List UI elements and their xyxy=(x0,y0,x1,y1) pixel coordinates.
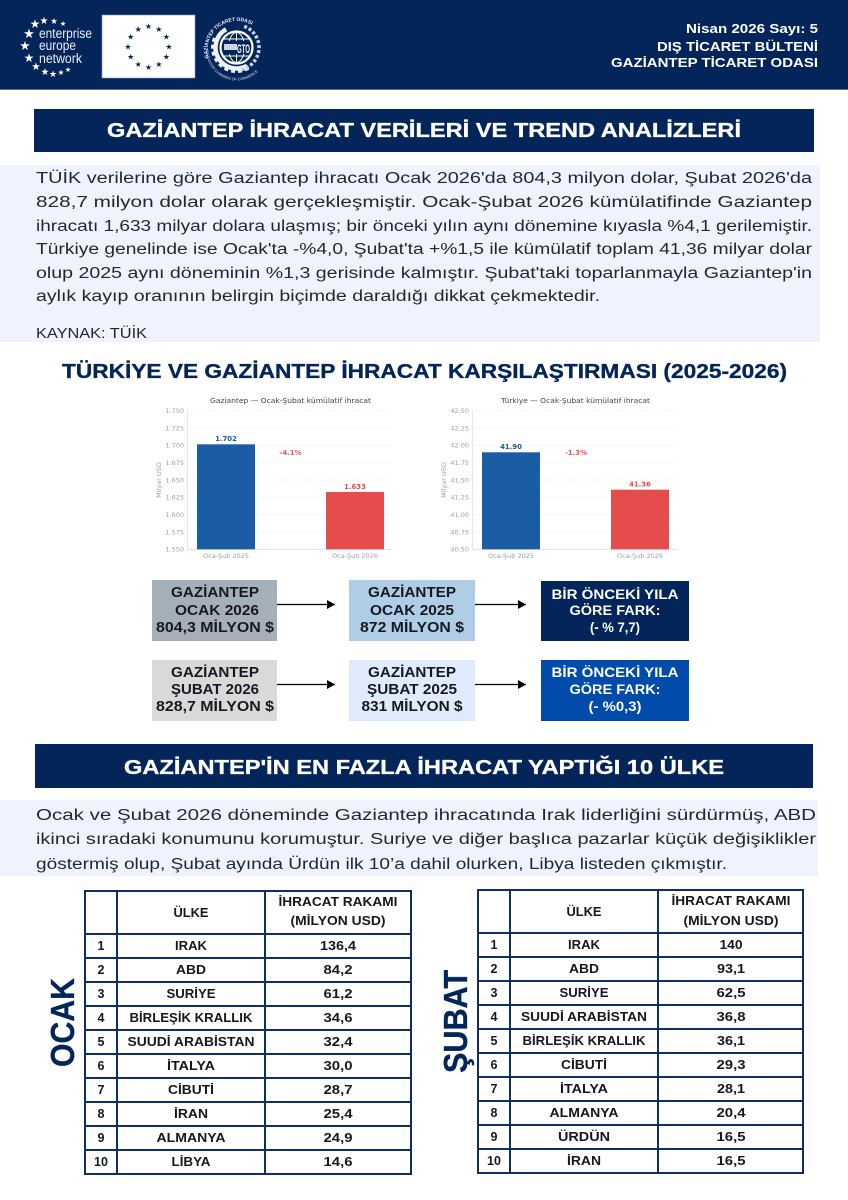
chart: Türkiye bar chart: 40.75 xyxy=(450,528,469,536)
row 5 xyxy=(491,1033,745,1048)
box: Gaziantep Şubat 2026: 828,7 MİLYON $ xyxy=(156,698,274,715)
row 9: 9 xyxy=(491,1130,498,1144)
row 1: IRAK xyxy=(568,938,600,952)
row 10: 10 xyxy=(487,1154,501,1168)
row 8: 8 xyxy=(98,1107,105,1121)
row 1: 1 xyxy=(98,939,105,953)
row 7: CİBUTİ xyxy=(168,1082,214,1097)
row 2: ABD xyxy=(176,963,206,977)
box: Gaziantep Ocak 2026: 804,3 MİLYON $ xyxy=(156,619,274,636)
box: Gaziantep Şubat 2025: GAZİANTEP xyxy=(368,664,456,681)
chart: Gaziantep bar chart: 1.750 xyxy=(165,407,184,415)
box: Şubat difference: (- %0,3) xyxy=(588,699,642,714)
icon: enterprise europe network logo: ★ xyxy=(23,26,35,41)
icon: enterprise europe network logo: ★ xyxy=(31,61,41,73)
bar: Türkiye 2026 xyxy=(611,480,669,560)
row 8: 8 xyxy=(491,1106,498,1120)
row 10 xyxy=(94,1154,353,1169)
bulletin info: GAZİANTEP TİCARET ODASI xyxy=(611,55,818,70)
row 8: ALMANYA xyxy=(550,1106,618,1120)
table header xyxy=(566,893,790,928)
row 8: İRAN xyxy=(174,1106,208,1121)
row 8 xyxy=(98,1106,353,1121)
chart: Türkiye bar chart: 42.00 xyxy=(450,442,469,450)
row 3: 62,5 xyxy=(716,986,746,1000)
row 6: 30,0 xyxy=(324,1059,353,1073)
box: Gaziantep Ocak 2026: GAZİANTEP xyxy=(171,584,259,601)
row 3: SURİYE xyxy=(560,985,608,1000)
row 10: İRAN xyxy=(567,1153,601,1168)
row 1 xyxy=(491,938,743,952)
panel: intro text: TÜİK verilerine göre Gaziantep ihracatı Ocak 2026'da 804,3 milyon dolar, Şubat 2026'da xyxy=(36,169,812,187)
row 5 xyxy=(98,1034,353,1049)
label: Ocak: OCAK xyxy=(44,978,81,1067)
row 2: 2 xyxy=(98,963,105,977)
chart: Gaziantep bar chart: 1.700 xyxy=(165,442,184,450)
chart: Gaziantep bar chart: 1.625 xyxy=(165,494,184,502)
row 1: IRAK xyxy=(175,939,207,953)
icon: EU flag: ★ xyxy=(163,32,170,42)
box: Şubat difference: GÖRE FARK: xyxy=(570,682,660,697)
box: Gaziantep Şubat 2026 xyxy=(152,660,277,721)
box: Şubat difference xyxy=(541,660,689,721)
chart: Gaziantep bar chart: 1.550 xyxy=(165,546,184,554)
row 10: LİBYA xyxy=(172,1154,210,1169)
row 2 xyxy=(98,963,353,977)
chart: Gaziantep bar chart: 1.675 xyxy=(165,459,184,467)
row 9 xyxy=(491,1129,746,1144)
section heading bar: top 10 countries xyxy=(35,744,813,788)
change label: -4.1% xyxy=(280,449,302,457)
box: Gaziantep Ocak 2025: 872 MİLYON $ xyxy=(360,619,464,636)
table: Şubat xyxy=(478,890,803,1173)
icon: EU flag: ★ xyxy=(155,25,162,34)
row 8: 25,4 xyxy=(324,1107,353,1121)
heading: comparison: TÜRKİYE VE GAZİANTEP İHRACAT KARŞILAŞTIRMASI (2025-2026) xyxy=(62,360,787,383)
table header: (MİLYON USD) xyxy=(290,913,386,928)
row 4 xyxy=(491,1009,746,1024)
row 7: 7 xyxy=(98,1083,105,1097)
row 5: SUUDİ ARABİSTAN xyxy=(128,1034,254,1049)
row 8: 20,4 xyxy=(716,1106,746,1120)
row 4: 4 xyxy=(98,1011,105,1025)
row 8 xyxy=(491,1106,746,1120)
chart: Gaziantep bar chart: 1.575 xyxy=(165,528,184,536)
table header: İHRACAT RAKAMI xyxy=(672,893,790,908)
row 4 xyxy=(98,1010,353,1025)
chart: Gaziantep bar chart: 1.600 xyxy=(165,511,184,519)
chart: Türkiye bar chart: 41.00 xyxy=(450,511,469,519)
icon: enterprise europe network logo: ★ xyxy=(60,20,66,28)
box: Gaziantep Ocak 2025: OCAK 2025 xyxy=(370,603,454,619)
box: Ocak difference: BİR ÖNCEKİ YILA xyxy=(552,587,679,602)
chart: Türkiye bar chart: 41.50 xyxy=(450,476,469,484)
table: Ocak xyxy=(85,891,411,1174)
panel: intro text: aylık kayıp oranının belirgin biçimde daraldığı dikkat çekmektedir. xyxy=(36,288,600,305)
row 9: 24,9 xyxy=(324,1131,353,1145)
bar: Gaziantep 2026 xyxy=(326,483,384,560)
icon: EU flag: ★ xyxy=(127,52,134,62)
box: Ocak difference xyxy=(541,581,689,641)
arrow xyxy=(277,684,335,686)
panel: countries text: Ocak ve Şubat 2026 döneminde Gaziantep ihracatında Irak liderliğini sürdürmüş, ABD xyxy=(36,807,816,824)
row 9: 16,5 xyxy=(716,1130,746,1144)
arrow xyxy=(277,604,335,606)
box: Gaziantep Şubat 2026: GAZİANTEP xyxy=(171,664,259,681)
icon: enterprise europe network logo: europe xyxy=(39,38,76,53)
icon: EU flag: ★ xyxy=(145,22,152,31)
panel: countries text: göstermiş olup, Şubat ayında Ürdün ilk 10’a dahil olurken, Libya listeden çıkmıştır. xyxy=(36,855,727,873)
icon: EU flag: ★ xyxy=(145,63,152,72)
panel: intro text: KAYNAK: TÜİK xyxy=(36,324,147,342)
row 2: ABD xyxy=(569,962,599,976)
chart: Türkiye bar chart: 41.75 xyxy=(450,459,469,467)
row 4: 36,8 xyxy=(716,1010,746,1024)
chart: Türkiye bar chart: Milyar USD xyxy=(440,462,448,498)
row 4: SUUDİ ARABİSTAN xyxy=(521,1009,647,1024)
icon: enterprise europe network logo: ★ xyxy=(41,67,49,78)
icon: enterprise europe network logo: ★ xyxy=(40,16,49,27)
panel: countries text xyxy=(0,800,818,876)
chart: Gaziantep bar chart: Gaziantep — Ocak-Şubat kümülatif ihracat xyxy=(210,396,371,405)
row 3 xyxy=(98,986,353,1001)
panel: intro text: ihracatı 1,633 milyar dolara ulaşmış; bir önceki yılın aynı dönemine kıyasla %4,1 gerilemiştir. xyxy=(36,218,812,235)
chart: Türkiye bar chart: 42.50 xyxy=(450,407,469,415)
row 10 xyxy=(487,1153,746,1168)
bar: Gaziantep 2026: 1.633 xyxy=(344,483,366,491)
table header: (MİLYON USD) xyxy=(684,913,778,928)
bulletin info xyxy=(611,21,818,70)
box: Gaziantep Şubat 2025: ŞUBAT 2025 xyxy=(367,682,457,698)
row 7: 7 xyxy=(491,1082,498,1096)
panel: intro text: olup 2025 aynı döneminin %1,3 gerisinde kalmıştır. Şubat'taki toparlanmayla Gaziantep'in xyxy=(36,265,812,282)
title bar xyxy=(34,109,814,152)
panel: intro text: Türkiye genelinde ise Ocak'ta -%4,0, Şubat'ta +%1,5 ile kümülatif toplam 41,36 milyar dolar xyxy=(36,241,812,258)
row 3: SURİYE xyxy=(166,986,216,1001)
icon: enterprise europe network logo: ★ xyxy=(65,66,71,74)
bar: Türkiye 2025: Oca-Şub 2025 xyxy=(488,552,534,560)
row 9: 9 xyxy=(98,1131,105,1145)
icon: Gaziantep chamber of commerce seal: GAZİANTEP TİCARET ODASI xyxy=(203,18,253,58)
box: Gaziantep Ocak 2025: GAZİANTEP xyxy=(368,584,456,601)
panel: intro text xyxy=(0,165,820,342)
row 9 xyxy=(98,1131,353,1145)
icon: enterprise europe network logo: network xyxy=(39,51,82,66)
row 6: CİBUTİ xyxy=(561,1057,607,1072)
bar: Türkiye 2026: 41.36 xyxy=(629,480,651,488)
bar: Gaziantep 2026: Oca-Şub 2026 xyxy=(332,552,378,560)
row 10: 16,5 xyxy=(716,1154,746,1168)
row 1: 136,4 xyxy=(320,939,356,953)
icon: Gaziantep chamber of commerce seal: GTO xyxy=(237,44,250,56)
bulletin info: DIŞ TİCARET BÜLTENİ xyxy=(657,39,818,54)
box: Gaziantep Şubat 2026: ŞUBAT 2026 xyxy=(171,682,259,698)
row 1: 140 xyxy=(720,938,743,952)
icon: EU flag: ★ xyxy=(135,25,142,34)
icon: EU flag xyxy=(102,15,195,78)
icon: EU flag: ★ xyxy=(127,32,134,42)
icon: EU flag: ★ xyxy=(124,42,132,52)
icon: enterprise europe network logo: ★ xyxy=(19,39,31,53)
bulletin info: Nisan 2026 Sayı: 5 xyxy=(686,21,818,36)
row 6 xyxy=(491,1057,746,1072)
title bar: GAZİANTEP İHRACAT VERİLERİ VE TREND ANALİZLERİ xyxy=(107,119,741,142)
box: Gaziantep Şubat 2025 xyxy=(349,660,475,721)
icon: enterprise europe network logo: ★ xyxy=(50,16,58,26)
box: Gaziantep Ocak 2026: OCAK 2026 xyxy=(175,603,259,619)
icon: Gaziantep chamber of commerce seal xyxy=(203,18,261,80)
icon: enterprise europe network logo: ★ xyxy=(30,17,40,31)
box: Şubat difference: BİR ÖNCEKİ YILA xyxy=(552,665,679,680)
row 2: 93,1 xyxy=(717,962,745,976)
row 6: 29,3 xyxy=(716,1058,746,1072)
row 3: 3 xyxy=(491,986,498,1000)
row 9: ÜRDÜN xyxy=(558,1129,610,1144)
row 2: 84,2 xyxy=(324,963,353,977)
row 6: 6 xyxy=(491,1058,498,1072)
header band xyxy=(0,0,848,90)
row 5: 36,1 xyxy=(717,1034,745,1048)
chart: Türkiye bar chart: 40.50 xyxy=(450,546,469,554)
icon: enterprise europe network logo: ★ xyxy=(24,51,34,65)
icon: EU flag: ★ xyxy=(155,60,162,69)
chart: Türkiye bar chart: 42.25 xyxy=(450,424,469,432)
panel: countries text: ikinci sıradaki konumunu korumuştur. Suriye ve diğer başlıca pazarlar küçük değişiklikler xyxy=(36,831,816,848)
row 4: BİRLEŞİK KRALLIK xyxy=(130,1010,252,1025)
row 2 xyxy=(491,962,745,976)
row 6: İTALYA xyxy=(167,1058,215,1073)
table header xyxy=(174,894,398,928)
arrow xyxy=(475,684,526,686)
chart: Gaziantep bar chart: 1.725 xyxy=(165,424,184,432)
box: Ocak difference: GÖRE FARK: xyxy=(570,603,660,618)
bar: Gaziantep 2025: 1.702 xyxy=(215,435,237,443)
row 6: 6 xyxy=(98,1059,105,1073)
chart: Türkiye bar chart: 41.25 xyxy=(450,494,469,502)
row 4: 4 xyxy=(491,1010,498,1024)
icon: enterprise europe network logo xyxy=(19,16,92,79)
row 1 xyxy=(98,939,356,953)
row 2: 2 xyxy=(491,962,498,976)
box: Gaziantep Ocak 2025 xyxy=(349,580,475,641)
row 9: ALMANYA xyxy=(156,1131,226,1145)
row 5: 32,4 xyxy=(324,1035,353,1049)
arrow xyxy=(475,604,526,606)
icon: enterprise europe network logo: enterprise xyxy=(39,26,92,41)
panel: intro text: 828,7 milyon dolar olarak gerçekleşmiştir. Ocak-Şubat 2026 kümülatifinde Gaziantep xyxy=(36,194,812,211)
row 7 xyxy=(98,1082,353,1097)
bar: Türkiye 2025: 41.90 xyxy=(500,443,522,451)
row 7: 28,1 xyxy=(717,1082,745,1096)
icon: EU flag: ★ xyxy=(135,60,142,69)
row 7 xyxy=(491,1081,745,1096)
label: Şubat: ŞUBAT xyxy=(437,970,474,1073)
row 5: 5 xyxy=(98,1035,105,1049)
table header: ÜLKE xyxy=(566,904,602,919)
chart: Türkiye bar chart: Türkiye — Ocak-Şubat kümülatif ihracat xyxy=(500,396,650,405)
table header: ÜLKE xyxy=(174,905,208,920)
chart: Gaziantep bar chart xyxy=(155,396,393,560)
bar: Türkiye 2026: Oca-Şub 2026 xyxy=(617,552,663,560)
icon: enterprise europe network logo: ★ xyxy=(58,68,65,77)
change label: -1.3% xyxy=(565,449,587,457)
row 10: 14,6 xyxy=(324,1155,353,1169)
row 3: 61,2 xyxy=(324,987,353,1001)
bar: Türkiye 2025 xyxy=(482,443,540,560)
row 7: 28,7 xyxy=(324,1083,353,1097)
icon: Gaziantep chamber of commerce seal: GAZİANTEP CHAMBER OF COMMERCE xyxy=(206,50,258,80)
icon: EU flag: ★ xyxy=(165,42,173,52)
row 3: 3 xyxy=(98,987,105,1001)
row 4: 34,6 xyxy=(324,1011,353,1025)
chart: Gaziantep bar chart: 1.650 xyxy=(165,476,184,484)
section heading bar: top 10 countries: GAZİANTEP'İN EN FAZLA İHRACAT YAPTIĞI 10 ÜLKE xyxy=(124,755,724,779)
row 6 xyxy=(98,1058,353,1073)
row 10: 10 xyxy=(94,1155,108,1169)
row 7: İTALYA xyxy=(560,1081,608,1096)
icon: enterprise europe network logo: ★ xyxy=(49,69,57,79)
table header: İHRACAT RAKAMI xyxy=(278,894,398,909)
chart: Türkiye bar chart xyxy=(440,396,678,560)
row 1: 1 xyxy=(491,938,498,952)
chart: Gaziantep bar chart: Milyar USD xyxy=(155,462,163,498)
row 3 xyxy=(491,985,746,1000)
box: Ocak difference: (- % 7,7) xyxy=(590,620,640,635)
bar: Gaziantep 2025 xyxy=(197,435,255,560)
row 5: BİRLEŞİK KRALLIK xyxy=(522,1033,646,1048)
box: Gaziantep Ocak 2026 xyxy=(152,580,277,641)
row 5: 5 xyxy=(491,1034,498,1048)
box: Gaziantep Şubat 2025: 831 MİLYON $ xyxy=(362,698,462,715)
bar: Gaziantep 2025: Oca-Şub 2025 xyxy=(203,552,249,560)
icon: EU flag: ★ xyxy=(163,52,170,62)
